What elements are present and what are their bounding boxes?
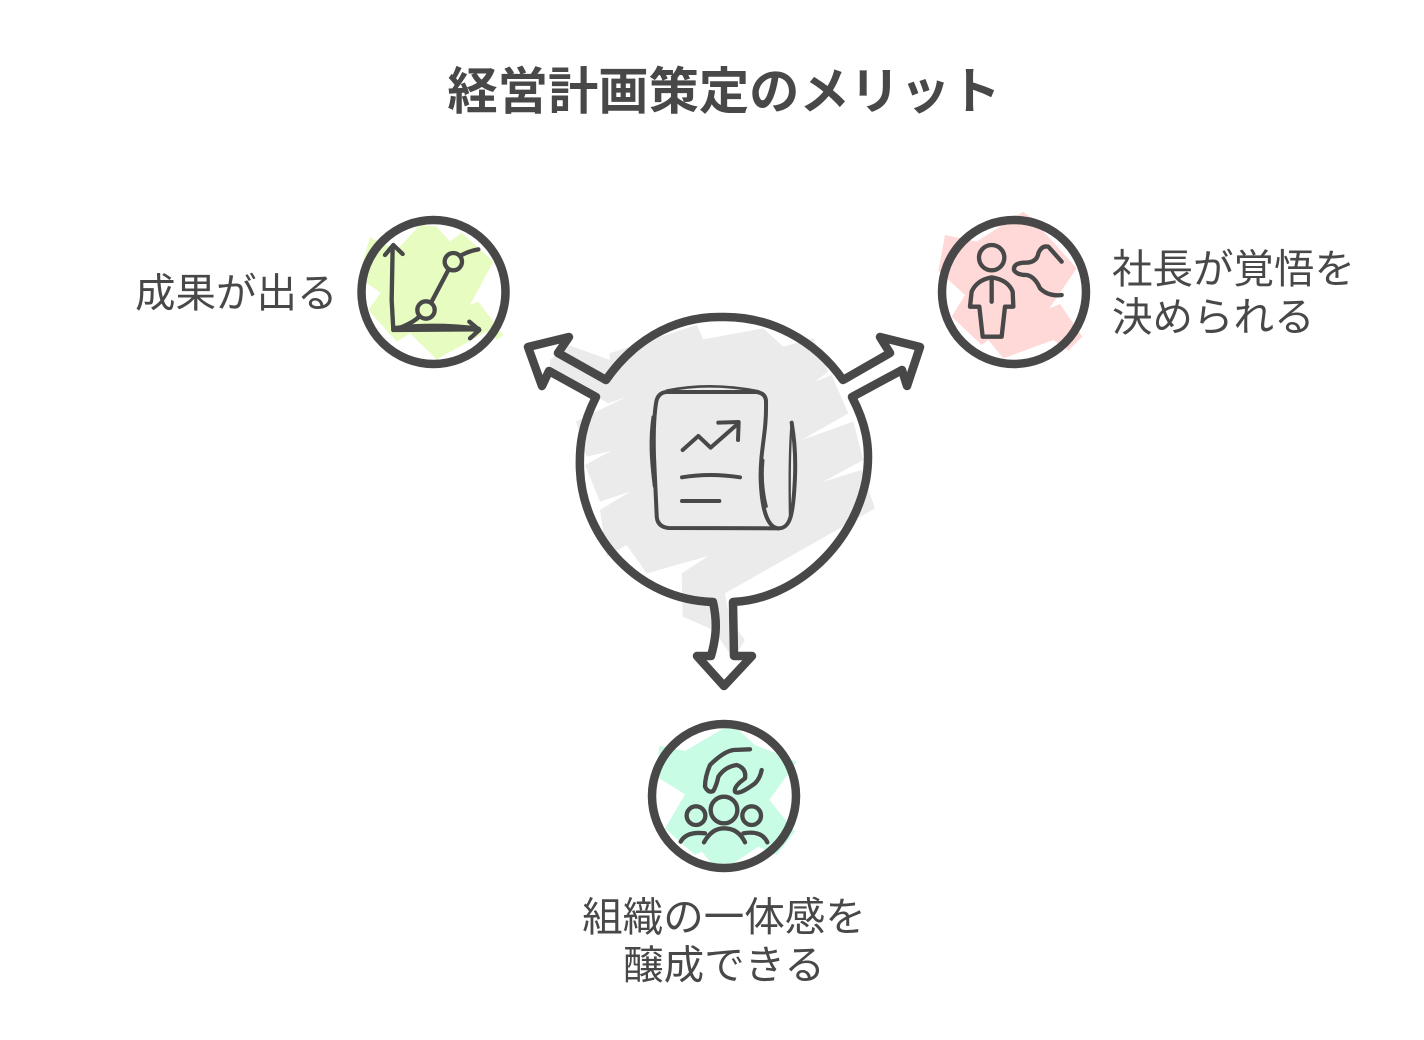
icon: document with chart (651, 386, 795, 528)
label: team unity line 2: 醸成できる (623, 942, 825, 988)
circle outline (942, 220, 1086, 364)
hub hatch fill (550, 325, 875, 658)
label: president resolve line 2: 決められる (1112, 294, 1314, 340)
icon hatch: green (358, 225, 503, 359)
circle outline (652, 724, 796, 868)
icon: growth chart (385, 245, 479, 338)
label: team unity: 組織の一体感を (582, 894, 866, 940)
hub outline and arrows (528, 317, 920, 686)
node: team unity (bottom) (652, 724, 797, 868)
label: president resolve: 社長が覚悟を (1112, 246, 1355, 292)
title: 経営計画策定のメリット (447, 63, 1001, 120)
icon: speaking person (970, 245, 1062, 337)
node: results (left) (358, 220, 506, 364)
icon hatch: mint (657, 728, 797, 863)
icon: hand over team (681, 749, 767, 842)
icon hatch: pink (938, 212, 1082, 358)
hub outline thick lower-right (800, 495, 862, 578)
circle outline (362, 220, 506, 364)
node: president resolve (right) (938, 212, 1086, 364)
label: results: 成果が出る (135, 270, 338, 316)
central hub with three arrows (528, 317, 920, 686)
